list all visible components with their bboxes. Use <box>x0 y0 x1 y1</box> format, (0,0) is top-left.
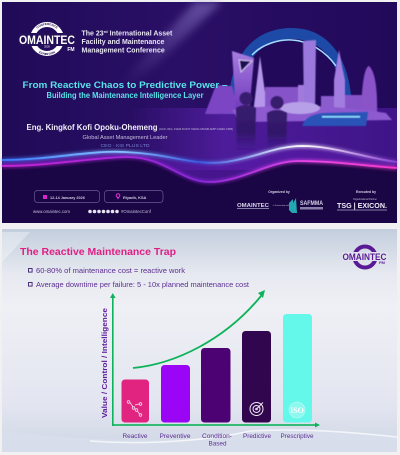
talk title: From Reactive Chaos to Predictive Power – <box>22 80 228 90</box>
category labels: Reactive <box>122 434 148 440</box>
executor logos: Executed by <box>356 190 376 194</box>
organizer logos: SAFMMA <box>300 201 324 207</box>
organizer logos: Organized by <box>268 190 290 194</box>
conference logo: EXHIBITION <box>39 51 55 55</box>
website and social links <box>33 209 152 214</box>
icon: target <box>250 402 263 416</box>
icon: network nodes <box>127 401 142 416</box>
stage platform <box>130 108 397 170</box>
location pill <box>104 190 163 202</box>
city skyline <box>205 40 392 122</box>
executor logos <box>337 190 387 210</box>
category labels: Prescriptive <box>280 434 314 440</box>
neon arch <box>228 28 352 114</box>
two engineers <box>236 92 287 150</box>
chart axes <box>110 293 320 428</box>
website and social links: www.omaintec.com <box>33 209 70 214</box>
website and social links: #OmaintecConf <box>121 209 152 214</box>
conference name: rd <box>104 29 108 34</box>
bullet points <box>28 266 249 289</box>
speaker name: (CLR, ING, FIAM FCIOT CENG MCGB AMP CAMA CPM) <box>159 127 233 131</box>
slide heading: The Reactive Maintenance Trap <box>20 247 176 258</box>
panel: reactive maintenance slide <box>2 229 397 452</box>
category labels: Preventive <box>160 434 191 440</box>
organizer logos: OMAINTEC <box>237 203 269 209</box>
glowing waves <box>2 146 397 182</box>
executor logos: Organizational Partner <box>353 198 377 201</box>
category labels <box>122 434 314 448</box>
bar: condition-based <box>201 348 230 422</box>
bar: reactive <box>122 380 149 422</box>
small logo: FM <box>379 260 386 265</box>
conference name: The 23 <box>82 30 104 38</box>
organizer logos <box>237 190 324 213</box>
category labels: Predictive <box>243 434 272 440</box>
location pill: Riyadh, KSA <box>123 195 147 200</box>
conference name: International Asset <box>108 30 173 38</box>
conference logo <box>19 22 75 56</box>
train <box>302 112 368 126</box>
bullet points: 60-80% of maintenance cost = reactive work <box>36 266 185 275</box>
date pill <box>34 190 100 202</box>
growth curve arrow <box>133 290 265 368</box>
small logo: OMAINTEC <box>342 252 387 262</box>
speaker name: Global Asset Management Leader <box>82 135 168 141</box>
panel: conference title slide <box>0 0 399 223</box>
organizer logos: in Partnership with <box>273 204 289 207</box>
talk title <box>22 80 228 100</box>
dark lower band <box>2 157 397 223</box>
talk title: Building the Maintenance Intelligence Layer <box>46 91 204 100</box>
small logo <box>342 246 388 268</box>
conference logo: CONFERENCE <box>36 23 58 29</box>
icon: iso badge: ISO <box>290 406 304 415</box>
bullet points: Average downtime per failure: 5 - 10x planned maintenance cost <box>36 280 249 289</box>
conference logo: 2026 <box>44 44 50 48</box>
speaker name <box>26 123 233 148</box>
conference name: Facility and Maintenance <box>82 39 164 46</box>
speaker name: CEO - KIS PLUS LTD <box>100 143 150 148</box>
conference logo: OMAINTEC <box>19 35 75 47</box>
bar: preventive <box>161 365 190 422</box>
category labels: Based <box>208 442 226 448</box>
conference name: Management Conference <box>82 48 165 54</box>
conference logo: FM <box>67 47 75 53</box>
y axis label: Value / Control / Intelligence <box>102 308 109 418</box>
bar: predictive <box>242 331 271 422</box>
category labels: Condition- <box>202 434 232 440</box>
date pill: 12-14 January 2026 <box>50 196 85 200</box>
executor logos: TSG | EXICON. <box>337 203 387 210</box>
conference name <box>82 29 173 54</box>
bar: prescriptive <box>283 314 312 422</box>
speaker name: Eng. Kingkof Kofi Opoku-Ohemeng <box>26 123 158 132</box>
